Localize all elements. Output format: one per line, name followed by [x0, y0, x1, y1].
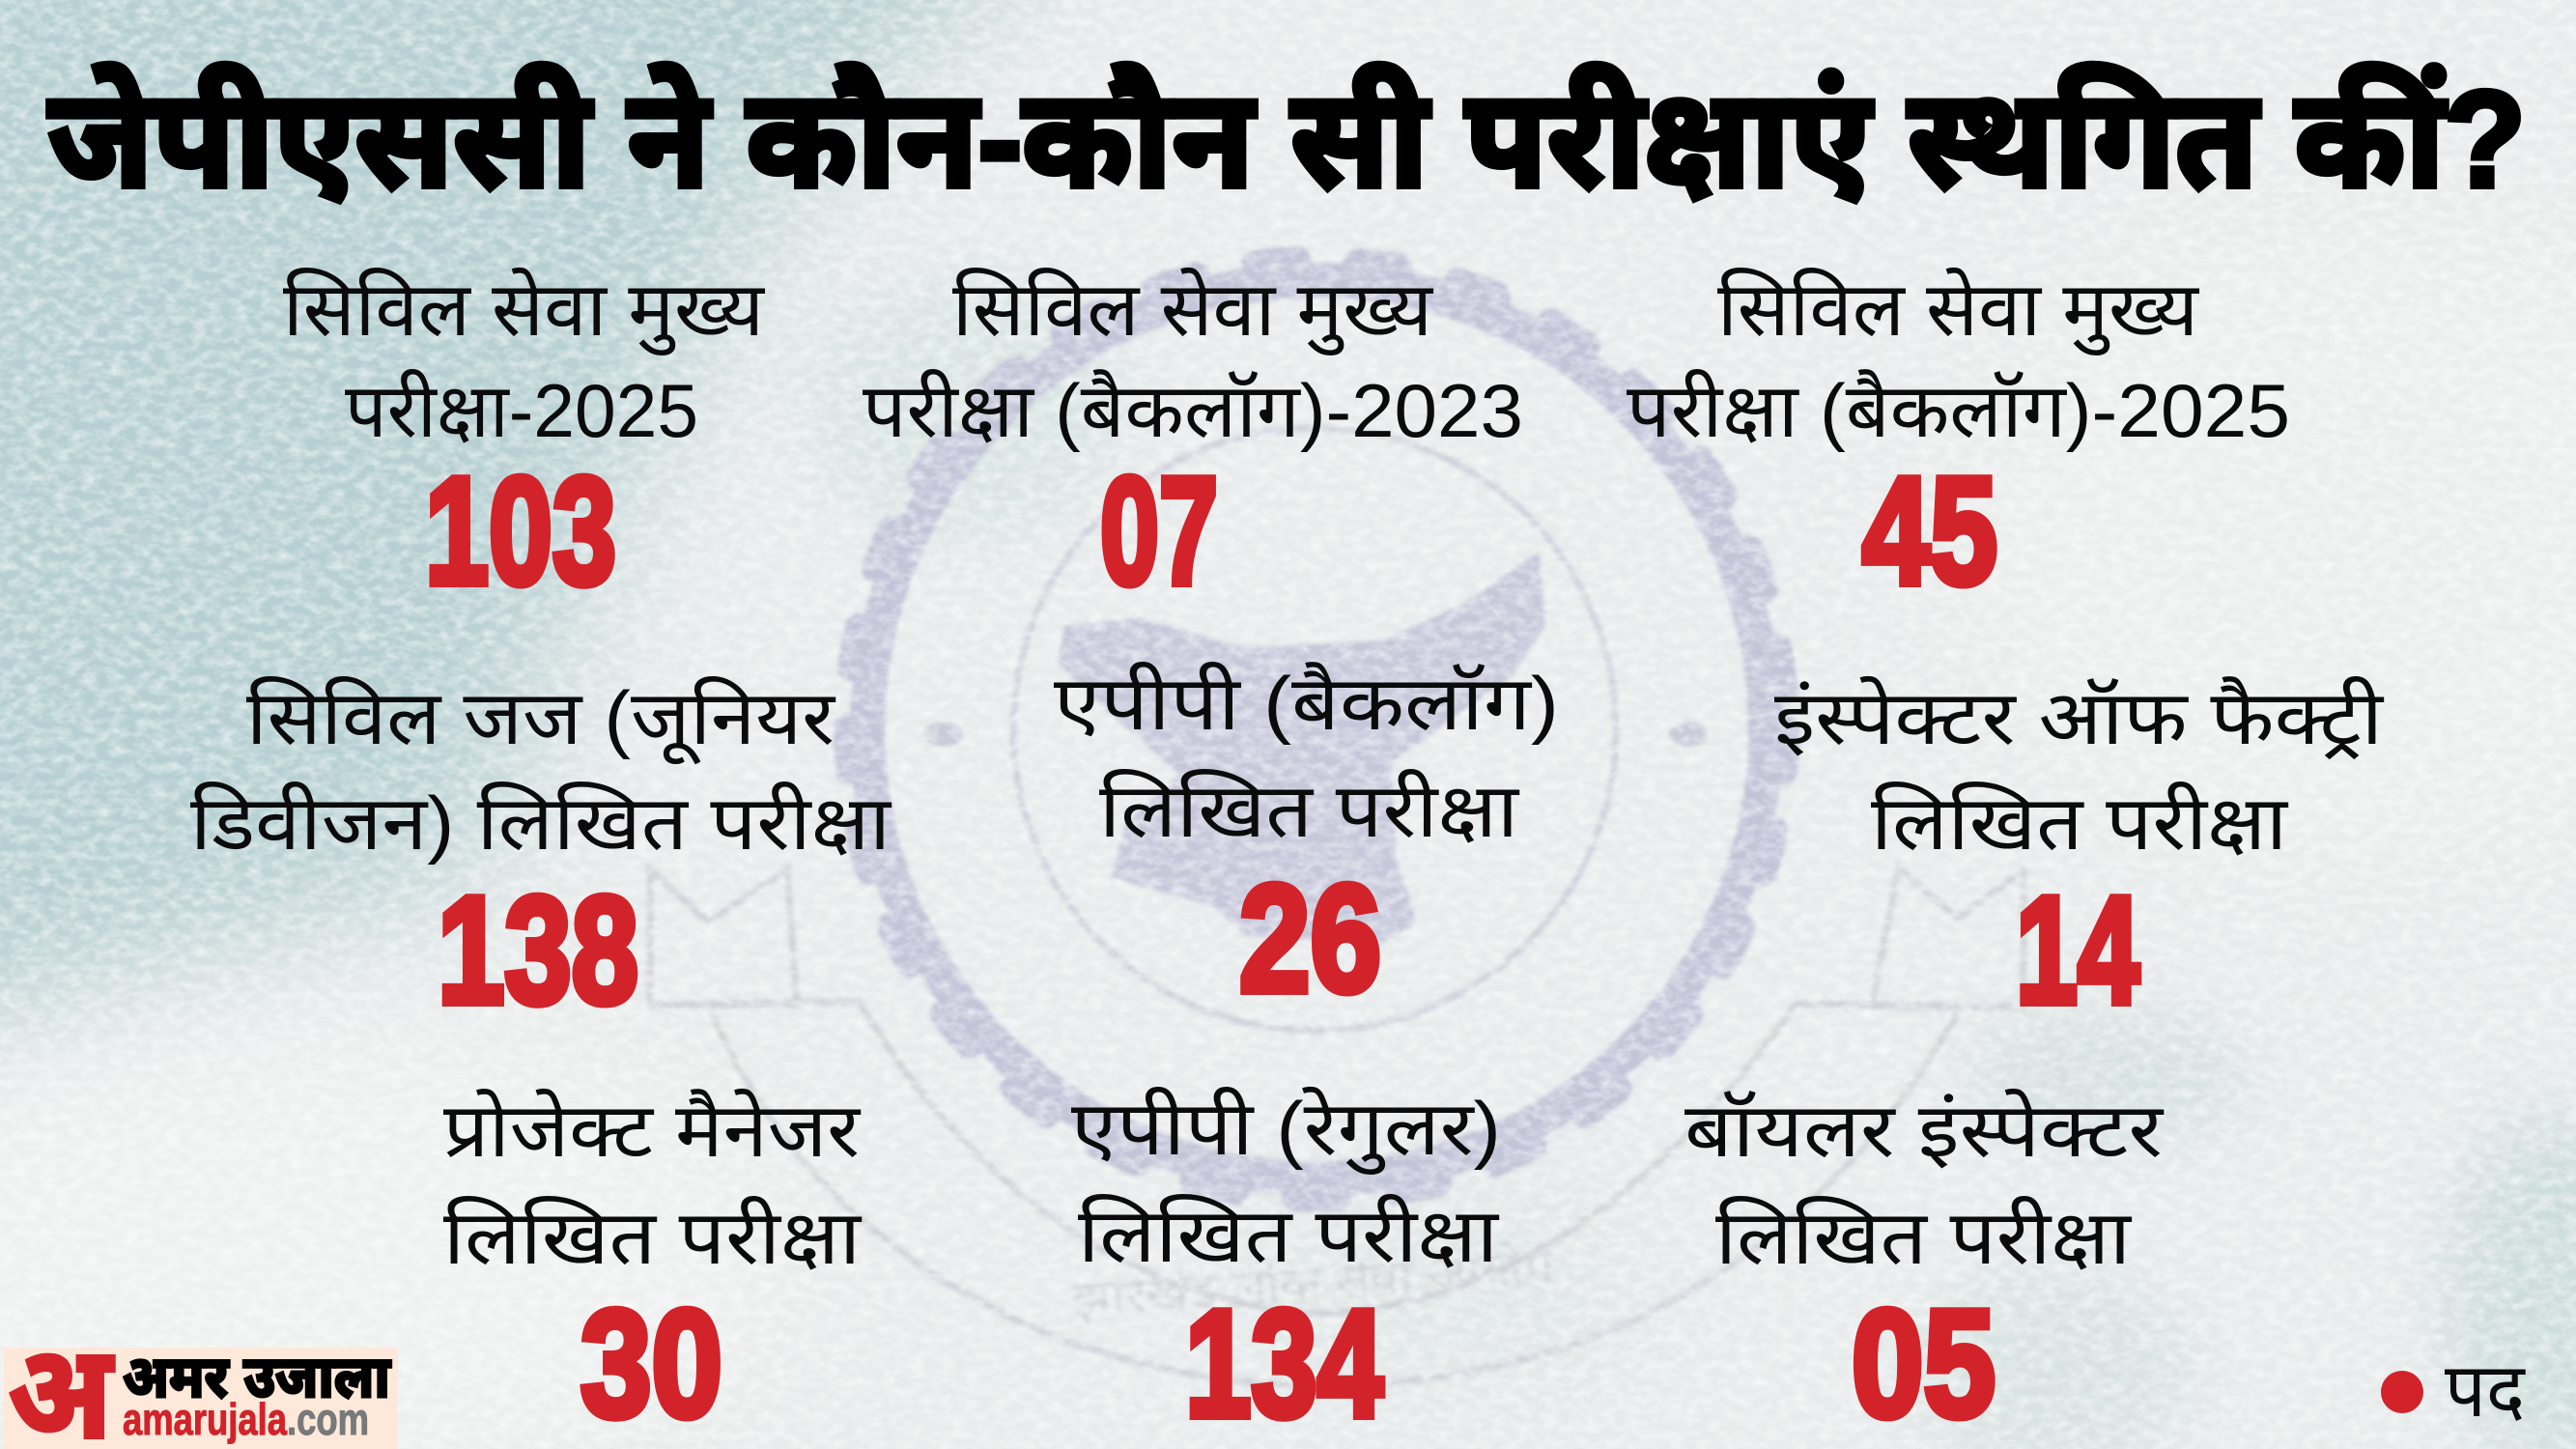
item label: लिखित परीक्षा: [443, 1195, 863, 1280]
item number: 30: [580, 1279, 722, 1449]
seal scalloped ring: [847, 260, 1786, 1199]
item number: 07: [1100, 446, 1218, 616]
item label: प्रोजेक्ट मैनेजर: [443, 1088, 862, 1173]
item: boiler inspector: [1684, 1088, 2165, 1449]
item label: सिविल सेवा मुख्य: [952, 267, 1434, 355]
item label: सिविल सेवा मुख्य: [1717, 267, 2200, 355]
item label: लिखित परीक्षा: [1715, 1195, 2133, 1280]
title: जेपीएससी ने कौन-कौन सी परीक्षाएं स्थगित कीं?: [48, 63, 2526, 216]
item label: सिविल जज (जूनियर: [246, 675, 836, 765]
item: inspector of factory: [1774, 675, 2385, 1036]
item number: 14: [2016, 866, 2139, 1036]
item label: [1774, 675, 2385, 866]
item label: [190, 675, 892, 866]
item number: 45: [1862, 446, 1997, 616]
item label: परीक्षा (बैकलॉग)-2023: [863, 368, 1523, 453]
seal ribbon motto: झारखंड लोक सेवा आयोग: [1069, 1239, 1556, 1326]
item label: एपीपी (रेगुलर): [1071, 1086, 1501, 1175]
item: APP backlog: [1054, 661, 1559, 1024]
item: civil judge: [190, 675, 892, 1036]
item label: डिवीजन) लिखित परीक्षा: [190, 781, 892, 866]
item label: लिखित परीक्षा: [1078, 1193, 1500, 1278]
item label: [1627, 267, 2290, 453]
item: civil services main backlog 2025: [1627, 267, 2290, 616]
seal inner ring: [1013, 428, 1616, 1031]
seal ribbon: [650, 867, 2024, 1386]
item label: [1054, 661, 1559, 853]
item label: [443, 1088, 863, 1280]
logo: Amar Ujala: [4, 1320, 398, 1449]
logo wordmark: अमर उजाला: [123, 1345, 391, 1409]
item label: लिखित परीक्षा: [1871, 781, 2289, 866]
item: APP regular: [1071, 1086, 1501, 1449]
item label: [1071, 1086, 1501, 1278]
item label: इंस्पेक्टर ऑफ फैक्ट्री: [1774, 675, 2385, 760]
item label: लिखित परीक्षा: [1099, 768, 1520, 853]
item number: 138: [438, 866, 638, 1036]
item label: [863, 267, 1523, 453]
item: civil services main backlog 2023: [863, 267, 1523, 616]
item number: 134: [1185, 1279, 1383, 1449]
item label: सिविल सेवा मुख्य: [283, 267, 766, 355]
legend: red dot means posts: [2381, 1348, 2527, 1433]
seal map of Jharkhand: [1058, 552, 1545, 944]
item number: 103: [425, 446, 616, 616]
item label: बॉयलर इंस्पेक्टर: [1684, 1088, 2165, 1173]
item label: [283, 267, 766, 453]
item label: एपीपी (बैकलॉग): [1054, 661, 1559, 746]
item: project manager: [443, 1088, 863, 1449]
item number: 26: [1239, 854, 1381, 1024]
background seal: JPSC emblem watermark: [650, 260, 2024, 1386]
legend: red dot means posts: पद: [2445, 1348, 2527, 1433]
item label: [1684, 1088, 2165, 1280]
seal side dots: [924, 722, 1708, 747]
item label: परीक्षा-2025: [345, 368, 698, 453]
item number: 05: [1852, 1279, 1996, 1449]
logo url: amarujala.com: [123, 1394, 369, 1444]
item: civil services main 2025: [283, 267, 766, 616]
item label: परीक्षा (बैकलॉग)-2025: [1627, 368, 2290, 453]
